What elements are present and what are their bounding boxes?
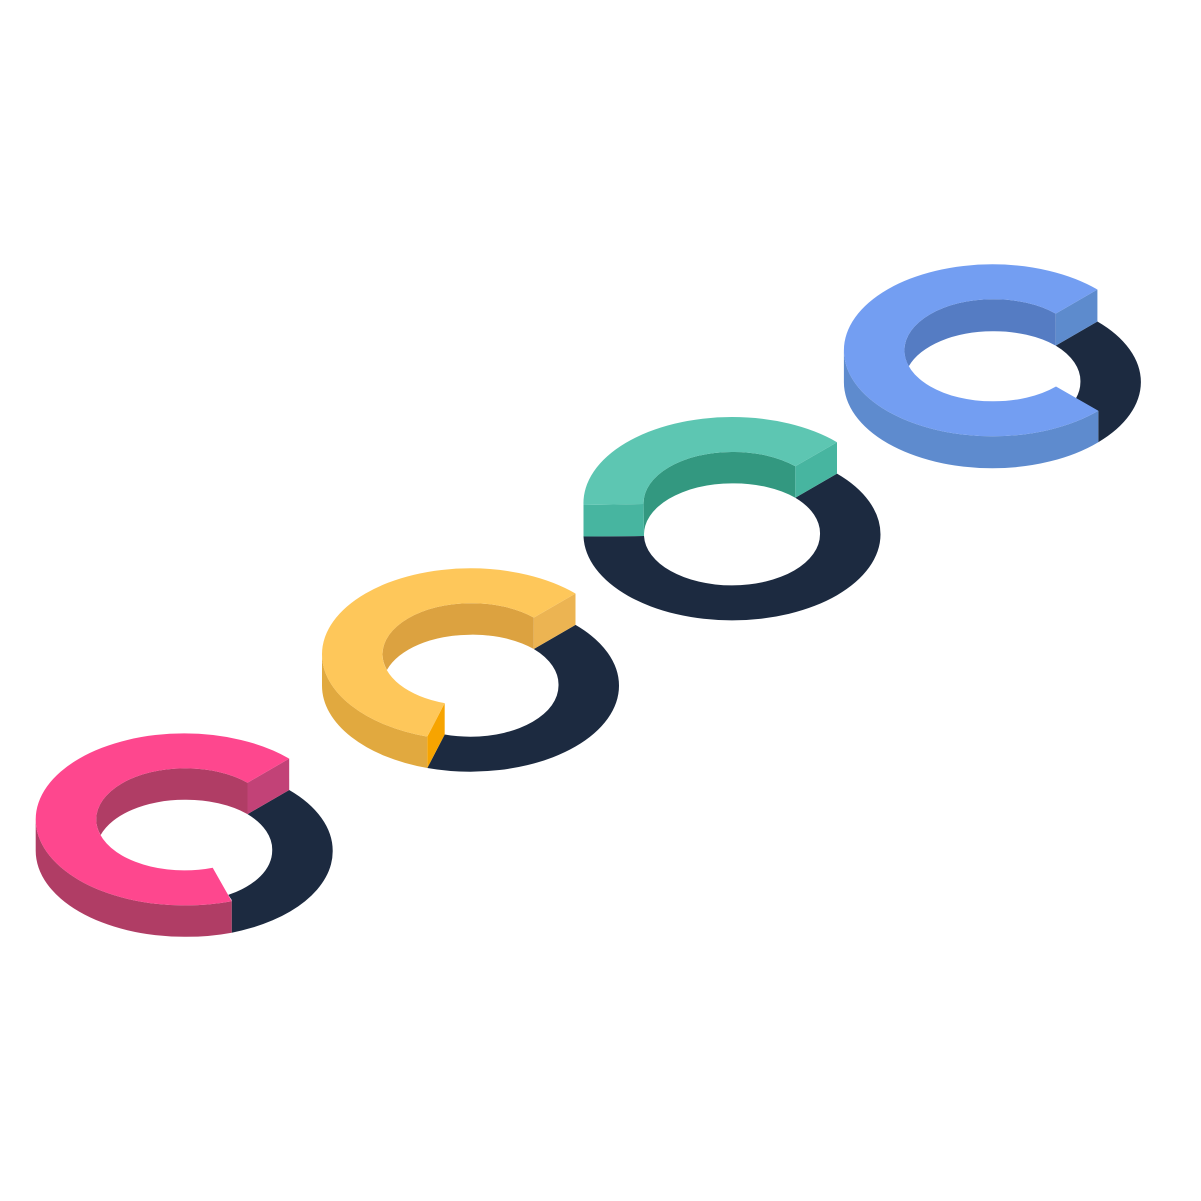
pink ring: dark remainder segment — [228, 790, 333, 933]
pink ring: cut face — [248, 759, 289, 814]
blue ring: outer wall — [844, 350, 1098, 468]
green ring: front cut face — [584, 504, 644, 536]
green ring: inner wall — [644, 452, 795, 536]
yellow ring: outer wall — [322, 654, 427, 768]
yellow ring: dark remainder segment — [427, 625, 619, 772]
ring chart: green — [583, 417, 880, 620]
green ring: back cut face — [795, 442, 837, 498]
ring chart: yellow — [322, 568, 619, 772]
yellow ring: front cut face — [427, 703, 445, 768]
yellow ring: inner wall — [382, 603, 534, 670]
ring chart: pink — [36, 733, 333, 937]
blue ring: top face — [844, 264, 1098, 436]
blue ring: dark remainder segment — [1056, 322, 1141, 442]
pink ring: top face — [36, 733, 289, 905]
yellow ring: top face — [322, 568, 576, 737]
blue ring: cut face — [1056, 290, 1097, 346]
pink ring: outer wall — [36, 819, 232, 937]
pink ring: inner wall — [96, 768, 248, 835]
ring chart: blue — [844, 264, 1141, 468]
blue ring: inner wall — [904, 299, 1056, 366]
green ring: top face — [583, 417, 837, 505]
yellow ring: back cut face — [534, 594, 576, 649]
green ring: dark remainder segment — [584, 474, 880, 620]
